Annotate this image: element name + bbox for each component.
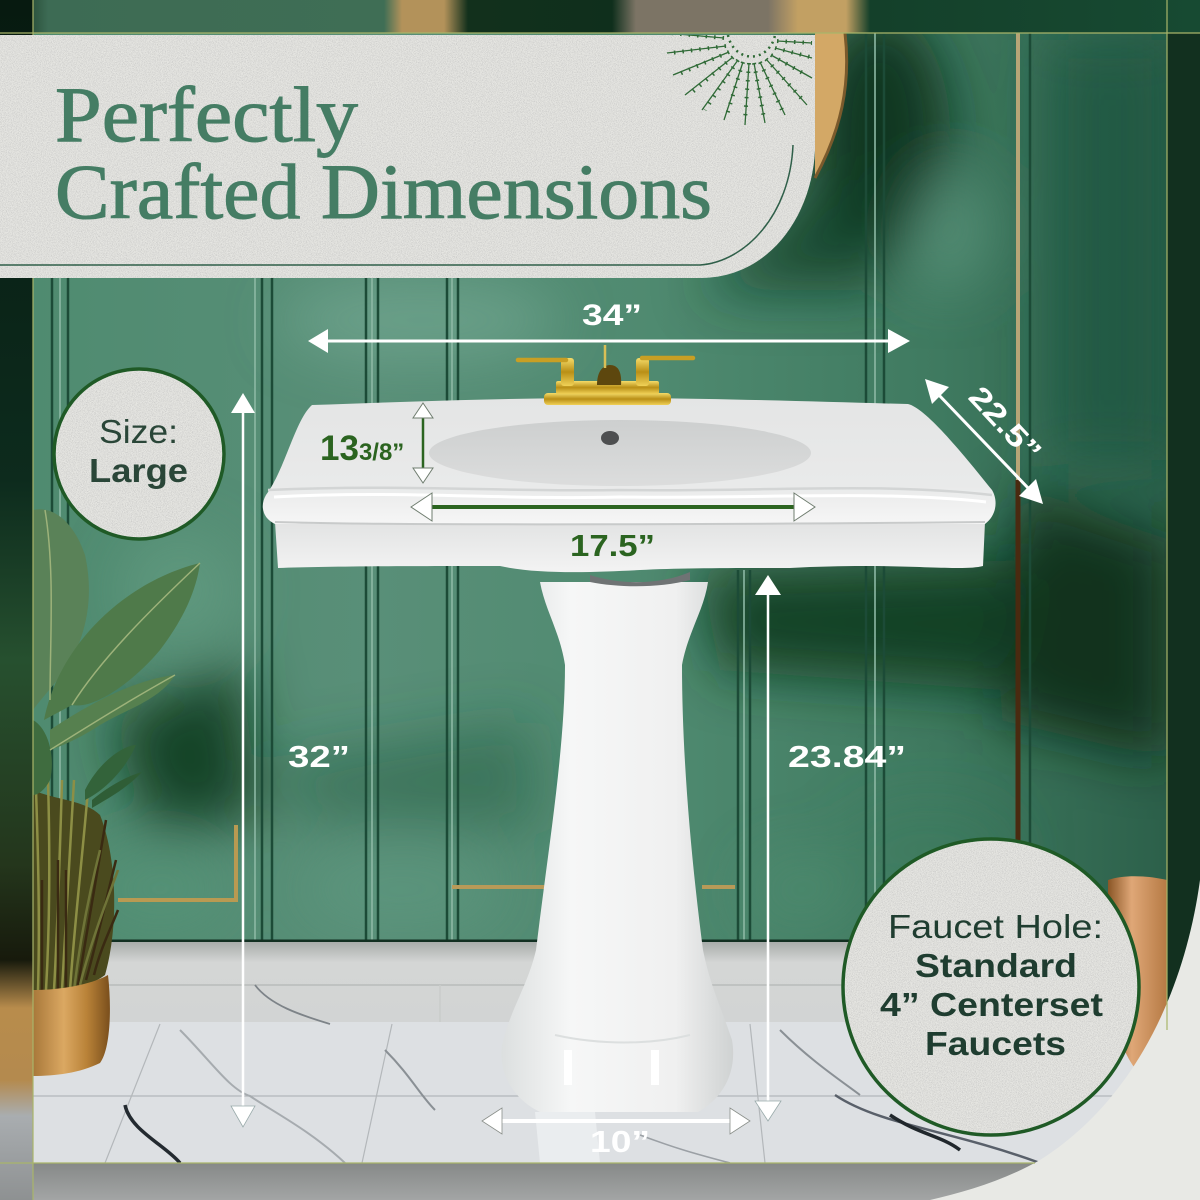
callout: faucet hole: Standard [915, 947, 1077, 984]
frond mass [33, 790, 114, 1000]
dimension: basin width 17.5 inches: 17.5” [570, 528, 655, 563]
dimension: base width 10 inches [482, 1108, 750, 1159]
skirting board [96, 942, 848, 1022]
callout: size large: Size: [99, 413, 178, 450]
dimension: overall width 34 inches: 34” [582, 299, 642, 332]
dimension: basin clearance height 23.84 inches: 23.84” [788, 739, 906, 774]
drain hole [601, 431, 619, 445]
wall shadows [84, 34, 1166, 852]
title text: Perfectly [55, 71, 358, 158]
fern fronds [36, 780, 118, 990]
dimension: basin depth 13 3/8 inches [320, 403, 433, 483]
small leaves [85, 745, 136, 800]
dimension: basin clearance height 23.84 inches [755, 575, 906, 1121]
copper pot right [1108, 876, 1167, 1074]
top blurred strip [0, 0, 1200, 33]
icon: sunburst [666, 33, 812, 125]
callout: faucet hole: Faucets [925, 1025, 1066, 1062]
faucet [518, 345, 693, 405]
apron [275, 522, 985, 572]
right blurred strip [1167, 33, 1200, 1033]
gold plant pot [33, 975, 110, 1076]
dimension: basin depth 13 3/8 inches: 133/8” [320, 429, 404, 468]
wall mouldings [50, 34, 1032, 942]
cream corner curve [930, 880, 1200, 1200]
callout: size large: Large [89, 452, 188, 489]
dimension: base width 10 inches: 10” [590, 1124, 650, 1159]
callout: faucet hole: 4” Centerset [880, 986, 1103, 1023]
dimension: depth 22.5 inches: 22.5” [962, 380, 1047, 469]
dimension: overall height 32 inches [231, 393, 350, 1127]
left blurred strip [0, 0, 33, 1200]
dimension: overall width 34 inches [308, 299, 910, 353]
title text: Crafted Dimensions [55, 148, 712, 235]
potted plant [33, 509, 200, 1076]
leaves [33, 509, 89, 710]
dimension: overall height 32 inches: 32” [288, 739, 350, 774]
mirror frame [815, 33, 848, 178]
dimension: depth 22.5 inches [925, 379, 1047, 504]
bowl [429, 420, 811, 486]
marble floor [33, 985, 1167, 1167]
callout: size large [54, 369, 224, 539]
callout: faucet hole [843, 839, 1139, 1135]
title panel [0, 33, 815, 278]
basin deck [263, 398, 996, 524]
dimension: basin width 17.5 inches [411, 493, 815, 563]
pedestal column [501, 582, 733, 1112]
bottom blurred strip [33, 1163, 1200, 1200]
title text [55, 71, 712, 235]
pedestal top joint [590, 572, 690, 586]
pedestal sink [263, 345, 996, 1112]
callout: faucet hole: Faucet Hole: [888, 908, 1103, 945]
